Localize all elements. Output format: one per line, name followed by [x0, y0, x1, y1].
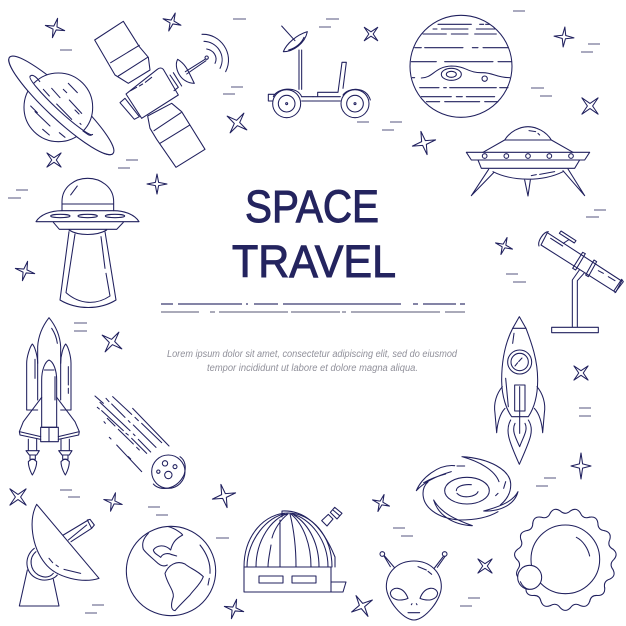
icon: galaxy [416, 457, 518, 526]
description text [167, 349, 457, 374]
title: SPACE [245, 181, 379, 232]
icon: alien [380, 552, 447, 620]
icon: earth [126, 526, 216, 616]
description text: tempor incididunt ut labore et dolore magna aliqua. [207, 363, 418, 374]
icon: jupiter [410, 15, 512, 117]
description text: Lorem ipsum dolor sit amet, consectetur adipiscing elit, sed do eiusmod [167, 349, 457, 360]
icon: meteor [95, 396, 185, 488]
title: TRAVEL [232, 236, 396, 287]
icon: ufo with beam [36, 178, 139, 307]
icon: satellite [95, 21, 229, 167]
icon: space shuttle [19, 318, 79, 475]
icon: saturn [0, 47, 123, 164]
icon: flying saucer [466, 127, 590, 196]
icon: telescope [539, 231, 623, 333]
icon: observatory [244, 507, 346, 592]
icon: sun with planet [511, 505, 619, 613]
divider lines [161, 304, 465, 312]
icon: radio dish [19, 504, 99, 606]
icon: rocket [495, 317, 545, 464]
title [232, 181, 396, 287]
icon: lunar rover [268, 26, 370, 118]
